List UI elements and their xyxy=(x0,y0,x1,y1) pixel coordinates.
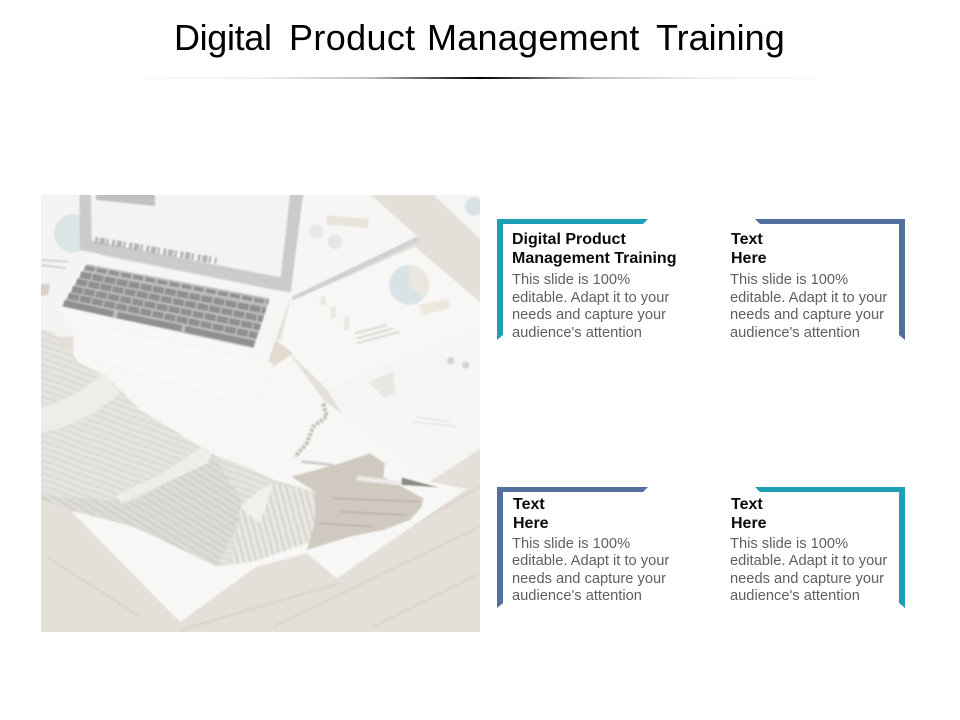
body text: needs and capture your xyxy=(512,307,666,323)
title divider xyxy=(110,77,850,79)
photo: person working at laptop with charts on wooden desk xyxy=(41,195,480,632)
heading: Here xyxy=(731,515,767,532)
wooden desk xyxy=(41,195,480,632)
heading: Here xyxy=(731,250,767,267)
body text: needs and capture your xyxy=(730,307,884,323)
papers xyxy=(41,195,100,337)
title: Product xyxy=(289,17,416,58)
body text: needs and capture your xyxy=(512,570,666,586)
body text: audience's attention xyxy=(730,588,860,604)
title: Training xyxy=(656,17,785,58)
body text: This slide is 100% xyxy=(512,272,630,288)
heading xyxy=(513,496,549,532)
body text: needs and capture your xyxy=(730,570,884,586)
keyboard xyxy=(62,264,270,348)
title: Digital xyxy=(174,17,272,58)
body text: audience's attention xyxy=(512,588,642,604)
body text xyxy=(730,536,887,604)
heading: Management Training xyxy=(512,250,676,267)
heading: Digital Product xyxy=(512,231,626,248)
paper charts xyxy=(409,265,430,299)
body text xyxy=(512,536,669,604)
body text: editable. Adapt it to your xyxy=(730,290,887,306)
body text: This slide is 100% xyxy=(512,536,630,552)
body text xyxy=(730,272,887,340)
heading xyxy=(731,231,767,267)
body text: This slide is 100% xyxy=(730,536,848,552)
body text: audience's attention xyxy=(512,324,642,340)
heading xyxy=(512,231,676,267)
hand with pen xyxy=(292,453,438,550)
heading: Text xyxy=(513,496,545,513)
heading: Text xyxy=(731,231,763,248)
body text: This slide is 100% xyxy=(730,272,848,288)
heading: Here xyxy=(513,515,549,532)
sleeve xyxy=(30,328,317,567)
heading: Text xyxy=(731,496,763,513)
body text: editable. Adapt it to your xyxy=(512,290,669,306)
body text: editable. Adapt it to your xyxy=(512,553,669,569)
heading xyxy=(731,496,767,532)
laptop xyxy=(62,195,304,373)
title: Management xyxy=(427,17,640,58)
body text xyxy=(512,272,669,340)
title xyxy=(174,17,785,58)
body text: audience's attention xyxy=(730,324,860,340)
body text: editable. Adapt it to your xyxy=(730,553,887,569)
